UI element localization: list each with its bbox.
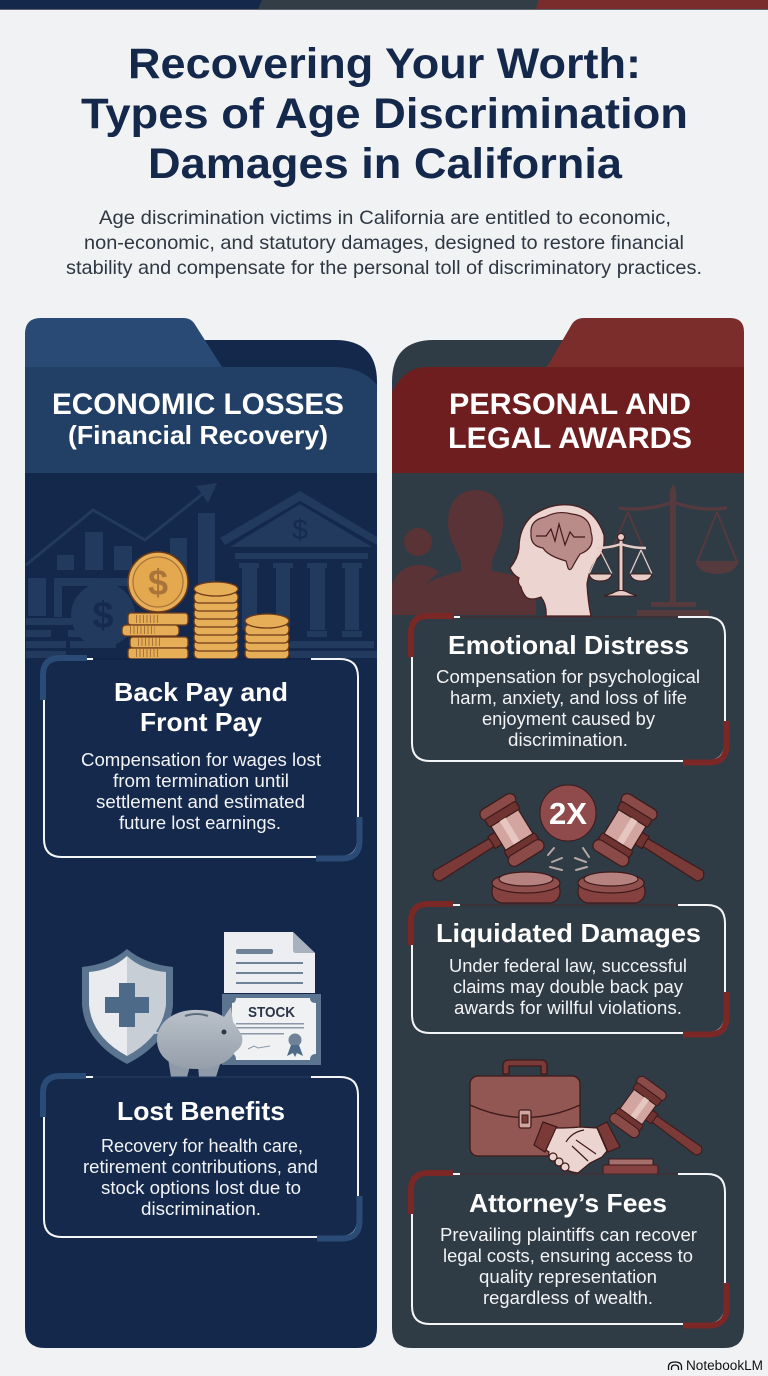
card: attorney's fees: quality representation [479, 1267, 657, 1287]
card: attorney's fees [411, 1173, 726, 1326]
panel header: LEGAL AWARDS [448, 422, 692, 455]
icon: right gavel [591, 791, 720, 906]
badge: 2X: 2X [549, 796, 587, 831]
card: lost benefits: stock options lost due to [101, 1178, 301, 1198]
card: attorney's fees: regardless of wealth. [483, 1288, 653, 1308]
icon: document [224, 932, 315, 993]
icon: stock certificate [222, 994, 321, 1065]
card: attorney's fees: Prevailing plaintiffs can recover [440, 1225, 697, 1245]
card: liquidated damages: claims may double back pay [453, 977, 683, 997]
card: emotional distress [411, 616, 726, 762]
panel: personal and legal awards [392, 318, 744, 1348]
intro text: Age discrimination victims in California are entitled to economic, [99, 207, 671, 229]
badge: 2X [540, 785, 596, 841]
intro text: non-economic, and statutory damages, designed to restore financial [84, 232, 684, 254]
icon: gold coins [122, 552, 289, 659]
icon: stock certificate: STOCK [248, 1004, 295, 1021]
title: Damages in California [148, 140, 623, 188]
icon: handshake [534, 1122, 620, 1173]
panel tab [547, 318, 744, 367]
card: liquidated damages: Under federal law, successful [449, 956, 687, 976]
panel header [392, 367, 744, 473]
icon: health shield [82, 949, 173, 1064]
card: lost benefits: Recovery for health care, [101, 1136, 303, 1156]
card: emotional distress: discrimination. [508, 730, 628, 750]
background illustration: chart and bank: $ [292, 514, 308, 545]
icon: head with brain [510, 505, 604, 616]
card: back pay and front pay: from termination until [113, 771, 289, 791]
card: emotional distress: Compensation for psychological [436, 667, 700, 687]
background illustration: silhouettes and scales [392, 484, 739, 616]
panel header: ECONOMIC LOSSES [52, 388, 344, 421]
card: back pay and front pay: Back Pay and [114, 677, 288, 707]
impact sparks [548, 848, 589, 870]
card: back pay and front pay: Compensation for wages lost [81, 750, 321, 770]
icon: right sound block [578, 872, 645, 903]
title [81, 40, 688, 188]
intro text: stability and compensate for the personal toll of discriminatory practices. [66, 257, 702, 279]
card: lost benefits [43, 1076, 360, 1238]
panel header [25, 367, 377, 473]
panel header: PERSONAL AND [449, 388, 691, 421]
card: emotional distress: Emotional Distress [448, 630, 689, 660]
card: back pay and front pay: settlement and estimated [96, 792, 305, 812]
top color strip [0, 0, 768, 10]
background illustration: chart and bank: $ [92, 595, 114, 637]
card: lost benefits: retirement contributions, and [83, 1157, 318, 1177]
card: attorney's fees: legal costs, ensuring access to [443, 1246, 693, 1266]
icon: piggy bank [152, 1007, 242, 1077]
card: attorney's fees: Attorney’s Fees [469, 1188, 667, 1218]
icon: left gavel [417, 791, 546, 906]
background illustration: chart and bank [26, 483, 377, 658]
panel tab [25, 318, 222, 367]
title: Types of Age Discrimination [81, 90, 688, 138]
card: back pay and front pay: future lost earnings. [119, 813, 281, 833]
card: back pay and front pay: Front Pay [140, 707, 263, 737]
title: Recovering Your Worth: [128, 40, 641, 88]
card: liquidated damages: Liquidated Damages [436, 918, 701, 948]
card: lost benefits: discrimination. [141, 1199, 261, 1219]
logo: NotebookLM: NotebookLM [686, 1358, 763, 1373]
icon: briefcase [470, 1060, 580, 1156]
card: emotional distress: harm, anxiety, and loss of life [450, 688, 687, 708]
card: lost benefits: Lost Benefits [117, 1096, 285, 1126]
icon: gold coins: $ [148, 562, 168, 603]
card: back pay and front pay [43, 658, 360, 858]
icon: gavel with block [603, 1074, 717, 1175]
icon: small scales [589, 534, 652, 596]
panel: economic losses [25, 318, 377, 1348]
card: emotional distress: enjoyment caused by [482, 709, 655, 729]
card: liquidated damages [411, 904, 726, 1034]
intro text [66, 207, 702, 279]
card: liquidated damages: awards for willful violations. [454, 998, 682, 1018]
icon: left sound block [492, 872, 560, 903]
panel header: (Financial Recovery) [68, 420, 328, 450]
